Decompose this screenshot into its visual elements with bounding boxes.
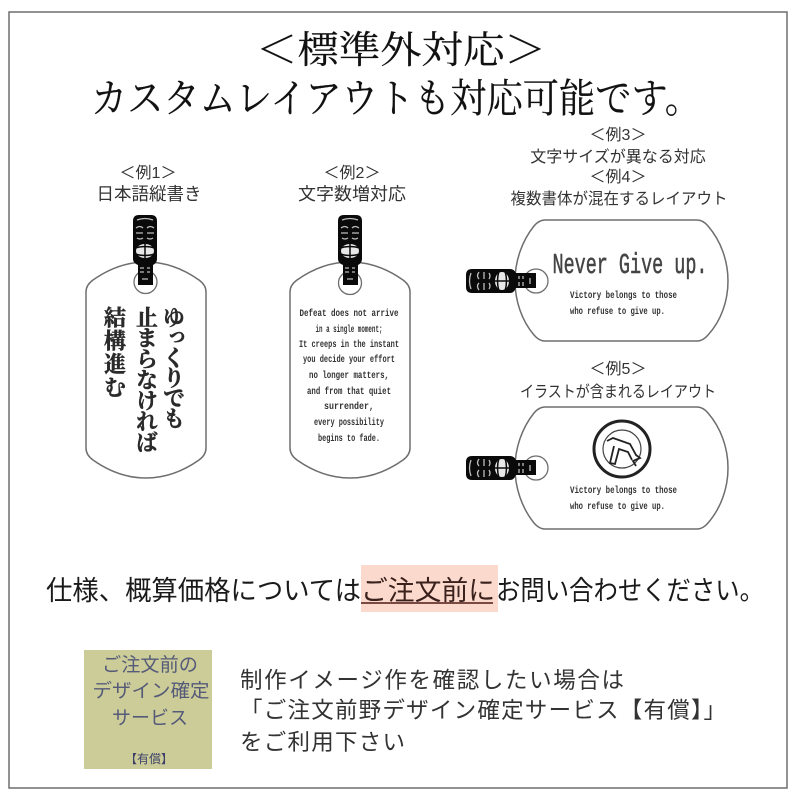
vertical message: 止まらなければ: [134, 306, 158, 453]
strap 1: [133, 215, 157, 285]
example 1 heading: [96, 164, 202, 204]
example 5: illustrated tag: [466, 360, 728, 529]
small message: Victory belongs to those: [570, 290, 677, 302]
notice text: お問い合わせください。: [496, 576, 764, 606]
tag outline 1: [86, 262, 206, 478]
small message: who refuse to give up.: [570, 306, 665, 318]
badge text: ご注文前の: [102, 654, 198, 676]
small message: [570, 290, 677, 318]
long message: begins to fade.: [318, 433, 380, 445]
example 2: long text tag: [290, 164, 410, 478]
example 5 heading: ＜例5＞: [590, 360, 646, 378]
icon: figure in circle: [594, 421, 650, 477]
tag outline 3: [515, 220, 728, 341]
strap 3: [466, 269, 536, 293]
explanation text: 「ご注文前野デザイン確定サービス【有償】」: [240, 698, 726, 723]
long message: you decide your effort: [303, 354, 395, 366]
ring 2: [338, 272, 362, 294]
long message: It creeps in the instant: [299, 339, 399, 351]
large headline: Never Give up.: [552, 249, 708, 282]
example 2 heading: ＜例2＞: [324, 164, 380, 182]
explanation text: をご利用下さい: [240, 730, 405, 755]
explanation text: [240, 668, 726, 755]
notice text: 仕様、概算価格については: [46, 576, 361, 606]
title: カスタムレイアウトも対応可能です。: [91, 76, 701, 121]
badge text: 【有償】: [125, 752, 173, 766]
ring 4: [524, 456, 548, 480]
vertical message: [102, 306, 186, 453]
small message: who refuse to give up.: [570, 501, 665, 513]
example 1 heading: ＜例1＞: [120, 164, 176, 182]
example 3 and 4: mixed font tag: [466, 126, 728, 341]
example 5 heading: イラストが含まれるレイアウト: [520, 383, 716, 401]
example 1 heading: 日本語縦書き: [96, 184, 202, 204]
long message: and from that quiet: [307, 386, 391, 398]
underline: [361, 602, 493, 604]
vertical message: ゆっくりでも: [160, 306, 186, 429]
badge text: サービス: [112, 707, 188, 729]
notice text: ご注文前に: [361, 576, 495, 606]
example 5 heading: [520, 360, 716, 401]
strap 4: [466, 456, 536, 480]
long message: [299, 308, 399, 445]
small message: [570, 485, 677, 513]
highlight behind pre-order text: [361, 565, 498, 612]
example 3 and 4 heading: 複数書体が混在するレイアウト: [510, 190, 728, 208]
example 3 and 4 heading: 文字サイズが異なる対応: [530, 148, 706, 166]
badge text: [92, 654, 210, 766]
long message: every possibility: [314, 417, 384, 429]
example 3 and 4 heading: ＜例3＞: [590, 126, 646, 144]
tag outline 2: [290, 262, 410, 478]
example 2 heading: [298, 164, 406, 204]
strap 2: [338, 215, 362, 285]
example 1: vertical Japanese tag: [86, 164, 206, 478]
example 2 heading: 文字数増対応: [298, 184, 406, 204]
example 3 and 4 heading: ＜例4＞: [590, 168, 646, 186]
small message: Victory belongs to those: [570, 485, 677, 497]
tag outline 4: [515, 407, 728, 529]
badge text: デザイン確定: [92, 680, 210, 702]
title: [91, 30, 701, 121]
notice text: [46, 576, 764, 606]
long message: Defeat does not arrive: [300, 308, 398, 320]
long message: surrender,: [324, 401, 374, 413]
vertical message: 結構進む: [102, 306, 126, 398]
ring 1: [134, 270, 157, 294]
long message: no longer matters,: [309, 370, 389, 382]
service badge: [84, 650, 212, 769]
explanation text: 制作イメージ作を確認したい場合は: [240, 668, 624, 693]
example 3 and 4 heading: [510, 126, 728, 208]
title: ＜標準外対応＞: [256, 30, 546, 72]
long message: in a single moment;: [316, 324, 382, 336]
ring 3: [524, 269, 548, 293]
